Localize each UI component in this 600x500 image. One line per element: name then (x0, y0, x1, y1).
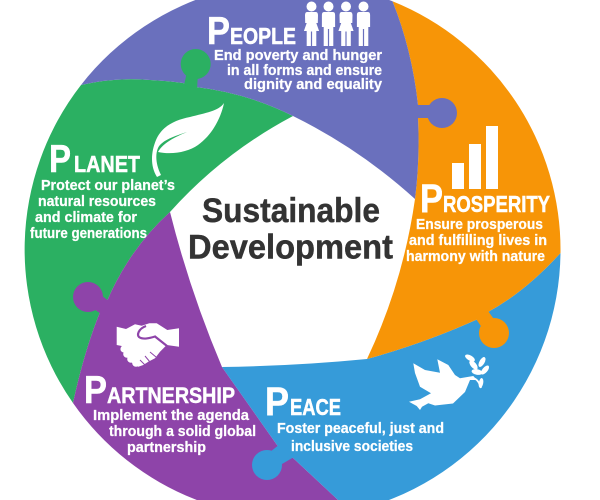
text: planet description: Protect our planet’s (41, 178, 175, 194)
text: partnership description: partnership (127, 440, 206, 456)
title: sustainable development (188, 192, 393, 266)
text: planet description: natural resources (38, 194, 156, 210)
heading: planet: LANET (74, 151, 140, 177)
heading: prosperity: ROSPERITY (443, 191, 550, 217)
icon: four people (304, 2, 370, 46)
heading: partnership: P (84, 369, 107, 412)
text: peace description: inclusive societies (291, 439, 413, 455)
title: sustainable development: Development (188, 228, 393, 266)
icon: bar chart (452, 126, 498, 189)
panel: planet (25, 79, 293, 403)
panel: prosperity (367, 1, 561, 359)
panel: peace (222, 253, 560, 500)
text: people description: in all forms and ensure (227, 63, 382, 79)
text: partnership description (93, 408, 256, 456)
connector knob: prosperity (476, 311, 509, 348)
text: partnership description: through a solid global (109, 424, 256, 440)
text: people description: dignity and equality (244, 77, 382, 93)
heading: peace: P (265, 380, 289, 424)
panel: partnership (73, 212, 350, 500)
text: people description: End poverty and hunger (214, 48, 382, 64)
text: people description (214, 48, 382, 93)
text: prosperity description: Ensure prosperous (416, 217, 543, 233)
panel: people (81, 0, 457, 199)
text: planet description: and climate for (35, 210, 137, 226)
segment: planet background (25, 79, 293, 403)
heading: partnership: ARTNERSHIP (107, 383, 235, 408)
segment: partnership background (73, 212, 350, 500)
text: prosperity description (406, 217, 547, 265)
text: partnership description: Implement the agenda (93, 408, 250, 424)
heading: people: EOPLE (230, 23, 296, 49)
connector knob: people (413, 98, 457, 128)
connector knob: peace (252, 444, 294, 480)
text: prosperity description: harmony with nature (406, 249, 545, 265)
segment: prosperity background (367, 1, 561, 359)
heading: planet: P (49, 138, 71, 181)
heading: prosperity: P (420, 177, 443, 221)
text: peace description: Foster peaceful, just and (277, 421, 444, 437)
heading: people: P (207, 10, 230, 53)
icon: leaf (152, 103, 224, 177)
text: peace description (277, 421, 444, 455)
title: sustainable development: Sustainable (202, 192, 380, 230)
text: prosperity description: and fulfilling lives in (409, 233, 547, 249)
segment: peace background (222, 253, 560, 500)
connector knob: partnership (73, 282, 109, 315)
heading: peace: EACE (290, 394, 341, 420)
connector knob: planet (181, 49, 211, 90)
icon: dove (409, 353, 491, 410)
text: planet description (30, 178, 175, 242)
icon: handshake (117, 323, 179, 367)
segment: people background (81, 0, 419, 199)
text: planet description: future generations (30, 226, 147, 242)
